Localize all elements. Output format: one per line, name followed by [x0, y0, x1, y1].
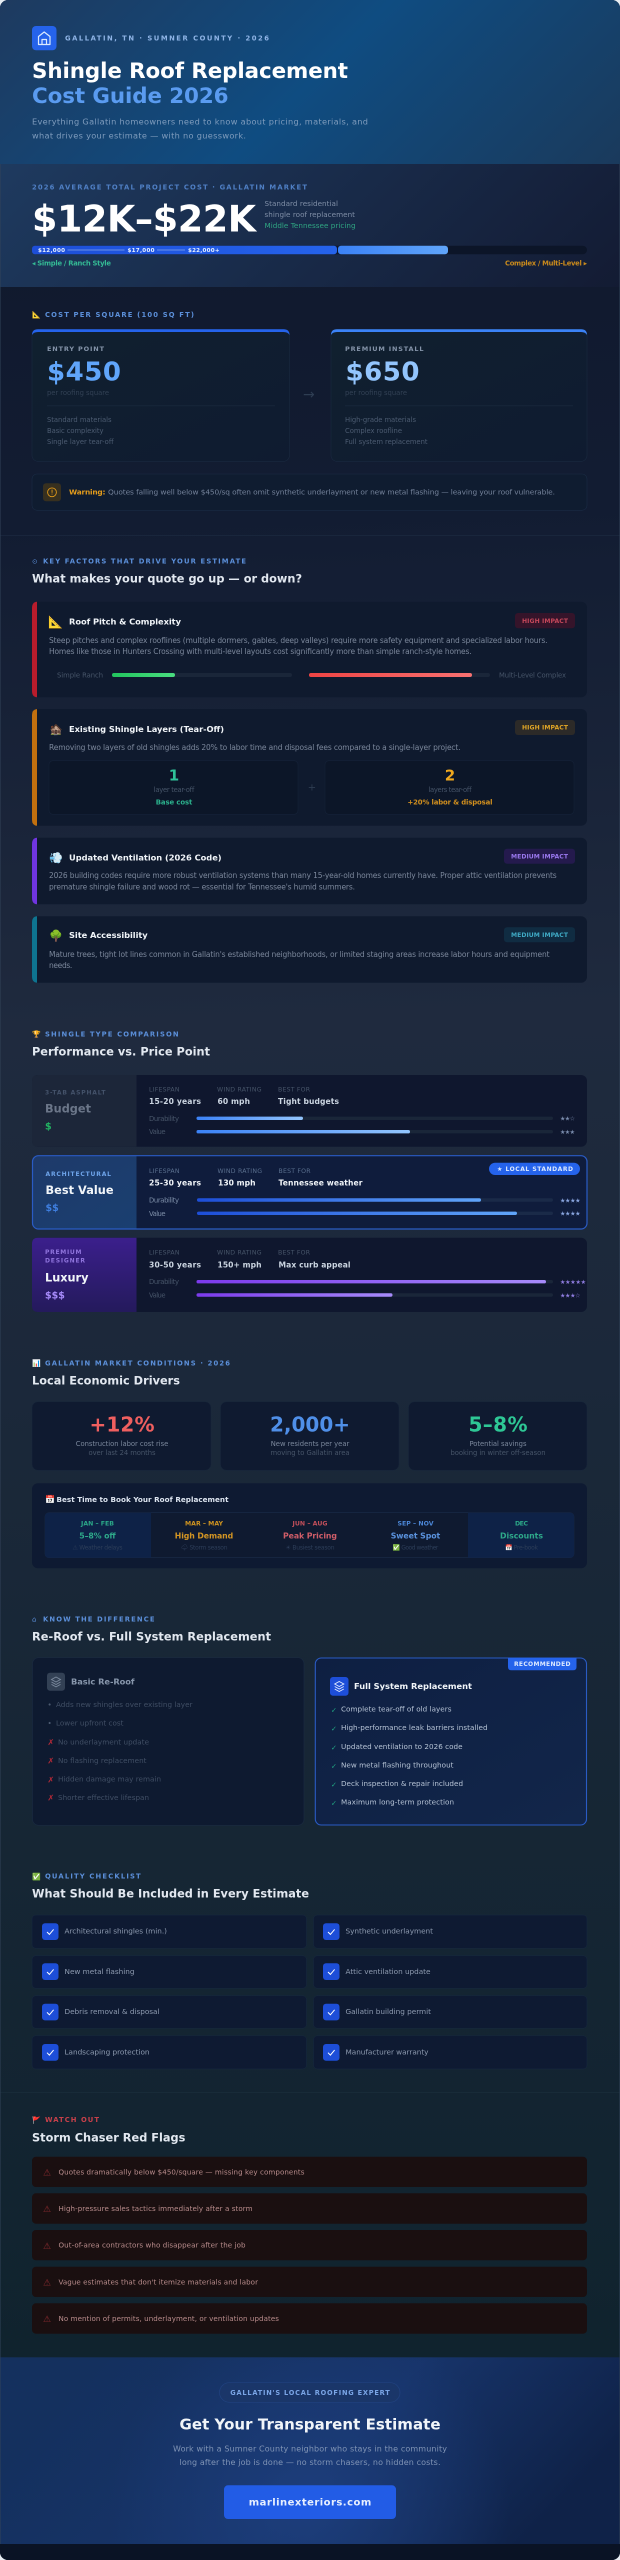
stat: labor cost: +12%: [90, 1412, 154, 1436]
heading: know the difference: Re-Roof vs. Full System Replacement: [32, 1630, 272, 1643]
factor card: site accessibility: [32, 916, 587, 983]
rating bars: Value: [149, 1291, 166, 1299]
badge: local standard: ★ LOCAL STANDARD: [497, 1166, 573, 1173]
footer strip: [0, 2544, 620, 2560]
list: re-roof points: Hidden damage may remain: [58, 1775, 161, 1784]
heading: shingle comparison: [32, 1030, 211, 1059]
price description: Middle Tennessee pricing: [264, 221, 356, 230]
month: mar-may: MAR – MAY: [185, 1520, 224, 1528]
red flag: low quotes: ⚠: [43, 2168, 51, 2178]
checklist item: synthetic underlayment: [314, 1915, 587, 1948]
checklist item: attic ventilation: [314, 1956, 587, 1988]
shingle card: luxury: WIND RATING: [217, 1249, 262, 1256]
shingle card: budget: WIND RATING: [217, 1086, 262, 1093]
panel: full system replacement: [315, 1658, 586, 1825]
stat: new residents: [220, 1402, 399, 1470]
panel: best time to book: [32, 1483, 587, 1568]
list: re-roof points: ✗: [48, 1775, 54, 1784]
cta heading: Get Your Transparent Estimate: [180, 2416, 440, 2434]
rating bars: ★★★★: [560, 1211, 580, 1218]
shingle card: best value: 25-30 years: [149, 1179, 201, 1188]
factor card: ventilation: Updated Ventilation (2026 Code): [69, 852, 222, 862]
scale labels: [32, 260, 588, 268]
checklist item: debris removal: [32, 1996, 306, 2028]
checklist item: building permit: [314, 1996, 587, 2028]
heading: market conditions: 📊: [32, 1359, 41, 1368]
rating bars: Durability: [149, 1278, 179, 1286]
card: entry point: ENTRY POINT: [47, 345, 105, 353]
heading: red flags: 🚩: [32, 2116, 41, 2124]
shingle card: luxury: LIFESPAN: [149, 1249, 180, 1256]
list: re-roof points: •: [48, 1719, 52, 1728]
stat: new residents: moving to Gallatin area: [270, 1449, 350, 1457]
card: premium install: Full system replacement: [345, 438, 428, 446]
list: full system points: New metal flashing throughout: [341, 1760, 454, 1770]
factor card: site accessibility: Site Accessibility: [69, 930, 148, 940]
shingle card: best value: Tennessee weather: [278, 1179, 363, 1188]
shingle card: luxury: Luxury: [45, 1271, 89, 1284]
factor card: ventilation: premature shingle failure and wood rot — essential for Tennessee's humid summers.: [49, 882, 355, 892]
badge: local expert: [220, 2383, 400, 2402]
red flag: high pressure: [32, 2193, 587, 2224]
comparison: one layer: 1: [169, 766, 179, 784]
heading: red flags: Storm Chaser Red Flags: [32, 2131, 186, 2144]
shingle card: budget: 3-TAB ASPHALT: [45, 1089, 106, 1096]
stat: labor cost: [32, 1402, 211, 1470]
rating bars: [149, 1278, 586, 1299]
list: full system points: ✓: [331, 1781, 337, 1789]
shingle card: luxury: DESIGNER: [45, 1258, 85, 1264]
section: cost per square: [0, 310, 620, 536]
title: Shingle Roof Replacement: [32, 59, 348, 84]
icon: house: 🏚️: [49, 723, 63, 736]
shingle card: best value: $$: [46, 1203, 59, 1214]
shingle card: best value: 130 mph: [218, 1179, 256, 1188]
plus sign: +: [308, 782, 316, 794]
icon: layers: [330, 1677, 348, 1696]
scale labels: ◂ Simple / Ranch Style: [32, 260, 111, 268]
month: sep-nov: SEP – NOV: [398, 1520, 434, 1528]
rating bars: ★★★★★: [560, 1279, 586, 1286]
factor card: roof pitch: Steep pitches and complex rooflines (multiple dormers, gables, deep valleys) require more safety equipment and specialized labor hours.: [49, 636, 548, 645]
comparison: two layers: [325, 761, 574, 814]
shingle card: luxury: Max curb appeal: [278, 1260, 350, 1269]
heading: quality checklist: QUALITY CHECKLIST: [45, 1872, 141, 1880]
comparison: one layer: [49, 761, 298, 814]
badge: high impact: HIGH IMPACT: [522, 725, 569, 732]
month: dec: DEC: [515, 1520, 528, 1528]
shingle card: budget: $: [45, 1122, 52, 1132]
cta text: [173, 2444, 447, 2467]
heading: key factors: ⊙: [32, 558, 37, 566]
shingle card: budget: 60 mph: [218, 1097, 250, 1106]
callout: warning: Warning:: [69, 488, 106, 497]
cta text: long after the job is done — no storm chasers, no hidden costs.: [180, 2458, 440, 2467]
heading: red flags: [0, 2092, 620, 2144]
checklist item: architectural shingles: [32, 1915, 306, 1948]
price range bar: $22,000+: [188, 248, 220, 254]
list: full system points: Maximum long-term protection: [341, 1798, 454, 1806]
month: jun-aug: [283, 1520, 337, 1551]
red flag: out of area: [32, 2230, 587, 2260]
red flag: no mention: No mention of permits, underlayment, or ventilation updates: [58, 2314, 279, 2323]
list: re-roof points: [48, 1700, 193, 1803]
panel: basic re-roof: [32, 1658, 304, 1825]
shingle card: best value: LIFESPAN: [149, 1168, 180, 1175]
cta text: Work with a Sumner County neighbor who stays in the community: [173, 2444, 447, 2454]
red flag: out of area: Out-of-area contractors who disappear after the job: [58, 2241, 246, 2250]
heading: know the difference: KNOW THE DIFFERENCE: [43, 1616, 155, 1624]
hero eyebrow: GALLATIN, TN · SUMNER COUNTY · 2026: [65, 34, 269, 42]
label: average cost: 2026 AVERAGE TOTAL PROJECT COST · GALLATIN MARKET: [32, 184, 307, 192]
icon: layers: [47, 1673, 65, 1691]
panel: best time to book: 📅: [45, 1494, 55, 1504]
checklist item: metal flashing: [32, 1956, 306, 1988]
month: sep-nov: ✅ Good weather: [393, 1543, 439, 1551]
month: jun-aug: JUN – AUG: [292, 1520, 328, 1528]
badge: medium impact: MEDIUM IMPACT: [511, 853, 569, 860]
stat: savings: booking in winter off-season: [450, 1449, 546, 1457]
stat: savings: Potential savings: [470, 1440, 527, 1448]
price description: Standard residential: [264, 199, 338, 208]
rating bars: [149, 1115, 575, 1136]
heading: key factors: [32, 558, 302, 585]
icon: house logo: [32, 26, 56, 50]
checklist item: metal flashing: New metal flashing: [64, 1967, 134, 1976]
list: re-roof points: ✗: [48, 1794, 54, 1803]
list: full system points: Updated ventilation to 2026 code: [341, 1742, 463, 1751]
card: entry point: Standard materials: [47, 416, 112, 424]
checklist item: landscaping protection: [32, 2036, 306, 2069]
checklist item: attic ventilation: Attic ventilation update: [346, 1967, 431, 1976]
rating bars: ★★★: [560, 1129, 575, 1136]
card: entry point: per roofing square: [47, 389, 109, 397]
factor card: roof pitch: Roof Pitch & Complexity: [69, 616, 182, 626]
heading: market conditions: GALLATIN MARKET CONDITIONS · 2026: [45, 1360, 230, 1368]
list: full system points: Complete tear-off of old layers: [341, 1704, 452, 1714]
callout: warning: Quotes falling well below $450/sq often omit synthetic underlayment or new metal flashing — leaving your roof vulnerable.: [108, 488, 555, 497]
shingle card: budget: 15-20 years: [149, 1097, 201, 1106]
heading: quality checklist: ✅: [32, 1872, 41, 1881]
red flag: low quotes: Quotes dramatically below $450/square — missing key components: [58, 2168, 305, 2177]
stat: labor cost: over last 24 months: [88, 1449, 156, 1457]
callout: warning: [32, 474, 587, 510]
checklist item: debris removal: Debris removal & disposal: [64, 2007, 160, 2016]
stat: labor cost: Construction labor cost rise: [76, 1440, 168, 1448]
shingle card: budget: Tight budgets: [278, 1097, 339, 1106]
heading: quality checklist: [32, 1872, 309, 1901]
shingle card: best value: Best Value: [46, 1184, 114, 1197]
month: jan-feb: JAN – FEB: [80, 1520, 114, 1528]
card: premium install: High-grade materials: [345, 416, 416, 424]
month: mar-may: 🌩 Storm season: [180, 1543, 228, 1551]
shingle card: budget: LIFESPAN: [149, 1086, 180, 1093]
heading: shingle comparison: 🏆: [32, 1030, 41, 1039]
factor card: ventilation: [32, 838, 587, 904]
list: re-roof points: No underlayment update: [58, 1737, 150, 1746]
hero header: [0, 0, 620, 164]
factor card: shingle layers: Existing Shingle Layers (Tear-Off): [69, 724, 224, 734]
factor card: site accessibility: Mature trees, tight lot lines common in Gallatin's established neighborhoods, or limited staging areas increase labor hours and equipment: [49, 950, 550, 959]
arrow: →: [303, 387, 315, 403]
list: re-roof points: ✗: [48, 1757, 54, 1766]
month: jan-feb: ⚠ Weather delays: [72, 1544, 122, 1551]
heading: know the difference: ⌂: [32, 1616, 36, 1624]
badge: local expert: GALLATIN'S LOCAL ROOFING EXPERT: [230, 2389, 390, 2397]
month: jan-feb: [45, 1513, 151, 1558]
panel: full system replacement: Full System Replacement: [354, 1681, 472, 1691]
stat: new residents: New residents per year: [271, 1440, 349, 1448]
heading: market conditions: Local Economic Drivers: [32, 1374, 180, 1387]
factor card: site accessibility: needs.: [49, 961, 72, 970]
hero subtitle: what drives your estimate — with no guesswork.: [32, 130, 246, 140]
checklist item: manufacturer warranty: [314, 2036, 587, 2069]
factor card: roof pitch: [32, 602, 587, 697]
icon: triangle ruler: 📐: [48, 615, 63, 629]
comparison: one layer: layer tear-off: [154, 786, 195, 794]
complexity scale: Simple Ranch: [57, 671, 103, 679]
month: mar-may: [175, 1520, 233, 1551]
rating bars: Durability: [149, 1115, 179, 1123]
complexity scale: Multi-Level Complex: [499, 671, 566, 679]
month: mar-may: High Demand: [175, 1531, 233, 1540]
month: dec: Discounts: [500, 1531, 543, 1540]
red flag: high pressure: ⚠: [43, 2205, 51, 2215]
list: re-roof points: Shorter effective lifespan: [58, 1793, 149, 1802]
month: dec: [468, 1513, 574, 1558]
rating bars: Durability: [149, 1196, 179, 1204]
checklist item: building permit: Gallatin building permit: [346, 2007, 431, 2016]
comparison: two layers: 2: [445, 766, 455, 784]
stat: savings: [408, 1402, 587, 1470]
factor card: shingle layers: Removing two layers of old shingles adds 20% to labor time and disposal fees compared to a single-layer project.: [49, 743, 461, 752]
list: full system points: ✓: [331, 1762, 337, 1770]
card: premium install: PREMIUM INSTALL: [345, 345, 424, 353]
rating bars: ★★★★: [560, 1197, 580, 1204]
price description: [264, 199, 356, 230]
eyebrow: cost per square: COST PER SQUARE (100 SQ FT): [45, 311, 194, 319]
price range bar: $17,000: [128, 248, 155, 254]
price description: shingle roof replacement: [264, 210, 355, 219]
heading: know the difference: [32, 1616, 272, 1643]
badge: medium impact: [504, 927, 575, 942]
list: full system points: ✓: [331, 1800, 337, 1808]
icon: warning: [43, 483, 61, 501]
list: re-roof points: Lower upfront cost: [56, 1719, 124, 1728]
list: re-roof points: •: [48, 1700, 52, 1709]
badge: medium impact: MEDIUM IMPACT: [511, 932, 569, 939]
rating bars: ★★★☆: [560, 1292, 580, 1299]
card: premium install: Complex roofline: [345, 427, 402, 435]
factor card: roof pitch: Homes like those in Hunters Crossing with multi-level layouts cost significantly more than simple ranch-style homes.: [49, 647, 472, 656]
red flag: vague estimates: ⚠: [43, 2278, 51, 2288]
red flag: vague estimates: Vague estimates that don't itemize materials and labor: [58, 2277, 258, 2286]
red flag: low quotes: [32, 2157, 587, 2187]
heading: red flags: WATCH OUT: [45, 2116, 99, 2124]
list: re-roof points: ✗: [48, 1738, 54, 1747]
panel: call to action: [0, 2357, 620, 2544]
heading: key factors: What makes your quote go up — or down?: [32, 572, 302, 585]
shingle card: best value: [32, 1156, 587, 1229]
shingle card: luxury: $$$: [45, 1290, 65, 1302]
scale labels: Complex / Multi-Level ▸: [505, 260, 588, 268]
heading: market conditions: [32, 1359, 230, 1387]
title: Cost Guide 2026: [32, 84, 228, 109]
month: jun-aug: ☀ Busiest season: [286, 1544, 335, 1551]
shingle card: budget: Budget: [45, 1102, 92, 1115]
card: premium install: [331, 329, 587, 461]
badge: medium impact: [504, 849, 575, 864]
icon: tree: 🌳: [49, 928, 63, 942]
checklist item: landscaping protection: Landscaping protection: [64, 2047, 150, 2056]
list: re-roof points: Adds new shingles over existing layer: [56, 1700, 193, 1709]
button: website: marlinexteriors.com: [249, 2498, 371, 2509]
shingle card: luxury: 150+ mph: [218, 1260, 262, 1269]
factor card: shingle layers: [32, 709, 587, 826]
complexity scale: [57, 671, 566, 679]
shingle card: luxury: [32, 1238, 587, 1312]
price range bar: [32, 246, 587, 254]
list: re-roof points: No flashing replacement: [58, 1756, 147, 1765]
list: full system points: ✓: [331, 1725, 337, 1733]
card: entry point: [32, 329, 290, 461]
shingle card: luxury: 30-50 years: [149, 1260, 201, 1269]
card: premium install: per roofing square: [345, 389, 407, 397]
red flag: no mention: ⚠: [43, 2315, 51, 2325]
month: jun-aug: Peak Pricing: [283, 1531, 337, 1540]
factor card: ventilation: 2026 building codes require more robust ventilation systems than many 15-year-old homes currently have. Proper attic ventilation prevents: [49, 871, 557, 880]
card: entry point: $450: [47, 358, 121, 388]
shingle card: best value: BEST FOR: [278, 1168, 311, 1175]
eyebrow: cost per square: 📐: [32, 310, 41, 319]
shingle card: luxury: BEST FOR: [278, 1249, 311, 1256]
card: entry point: Basic complexity: [47, 427, 104, 435]
hero subtitle: Everything Gallatin homeowners need to know about pricing, materials, and: [32, 116, 368, 126]
shingle card: budget: BEST FOR: [278, 1086, 311, 1093]
panel: basic re-roof: Basic Re-Roof: [71, 1676, 135, 1686]
badge: high impact: [515, 720, 575, 735]
button: website: [224, 2485, 396, 2519]
stat: savings: 5–8%: [468, 1412, 528, 1436]
month: sep-nov: [391, 1520, 441, 1551]
comparison: two layers: layers tear-off: [428, 786, 472, 794]
price range bar: $12,000: [38, 248, 65, 254]
card: entry point: Single layer tear-off: [47, 438, 114, 446]
heading: key factors: KEY FACTORS THAT DRIVE YOUR ESTIMATE: [43, 558, 246, 566]
checklist item: synthetic underlayment: Synthetic underlayment: [346, 1926, 433, 1936]
card: premium install: $650: [346, 358, 420, 388]
panel: best time to book: Best Time to Book Your Roof Replacement: [56, 1495, 229, 1504]
heading: shingle comparison: SHINGLE TYPE COMPARISON: [45, 1030, 179, 1038]
shingle card: luxury: PREMIUM: [45, 1249, 82, 1256]
heading: quality checklist: What Should Be Included in Every Estimate: [32, 1888, 309, 1901]
shingle card: best value: WIND RATING: [218, 1168, 262, 1175]
month: jan-feb: 5–8% off: [79, 1531, 116, 1540]
list: full system points: High-performance leak barriers installed: [341, 1723, 488, 1732]
badge: high impact: HIGH IMPACT: [522, 618, 569, 625]
stat: new residents: 2,000+: [270, 1412, 350, 1436]
red flag: no mention: [32, 2303, 587, 2334]
red flag: high pressure: High-pressure sales tactics immediately after a storm: [58, 2204, 253, 2213]
badge: high impact: [515, 613, 575, 628]
badge: recommended: RECOMMENDED: [514, 1661, 571, 1668]
rating bars: Value: [149, 1128, 166, 1136]
month: sep-nov: Sweet Spot: [391, 1531, 441, 1540]
shingle card: budget: [32, 1075, 587, 1147]
list: full system points: [331, 1704, 488, 1808]
hero subtitle: [32, 116, 368, 140]
comparison: one layer: Base cost: [156, 798, 193, 806]
heading: shingle comparison: Performance vs. Price Point: [32, 1046, 211, 1059]
shingle card: best value: ARCHITECTURAL: [46, 1171, 111, 1178]
list: full system points: ✓: [331, 1744, 337, 1752]
rating bars: Value: [149, 1210, 166, 1218]
badge: local standard: [489, 1163, 580, 1175]
checklist item: manufacturer warranty: Manufacturer warranty: [346, 2047, 429, 2056]
big price range: $12K–$22K: [32, 198, 258, 240]
month: dec: 📅 Pre-book: [505, 1543, 539, 1551]
comparison: two layers: +20% labor & disposal: [408, 798, 492, 806]
red flag: vague estimates: [32, 2267, 587, 2297]
red flag: out of area: ⚠: [43, 2242, 51, 2252]
badge: recommended: [508, 1658, 576, 1670]
checklist item: architectural shingles: Architectural shingles (min.): [64, 1926, 167, 1936]
panel: average project cost: [0, 164, 620, 287]
icon: wind: 💨: [49, 851, 63, 864]
rating bars: ★★☆: [560, 1116, 575, 1123]
rating bars: [149, 1196, 580, 1218]
title: [32, 59, 348, 109]
list: full system points: ✓: [331, 1706, 337, 1714]
list: full system points: Deck inspection & repair included: [341, 1779, 463, 1788]
